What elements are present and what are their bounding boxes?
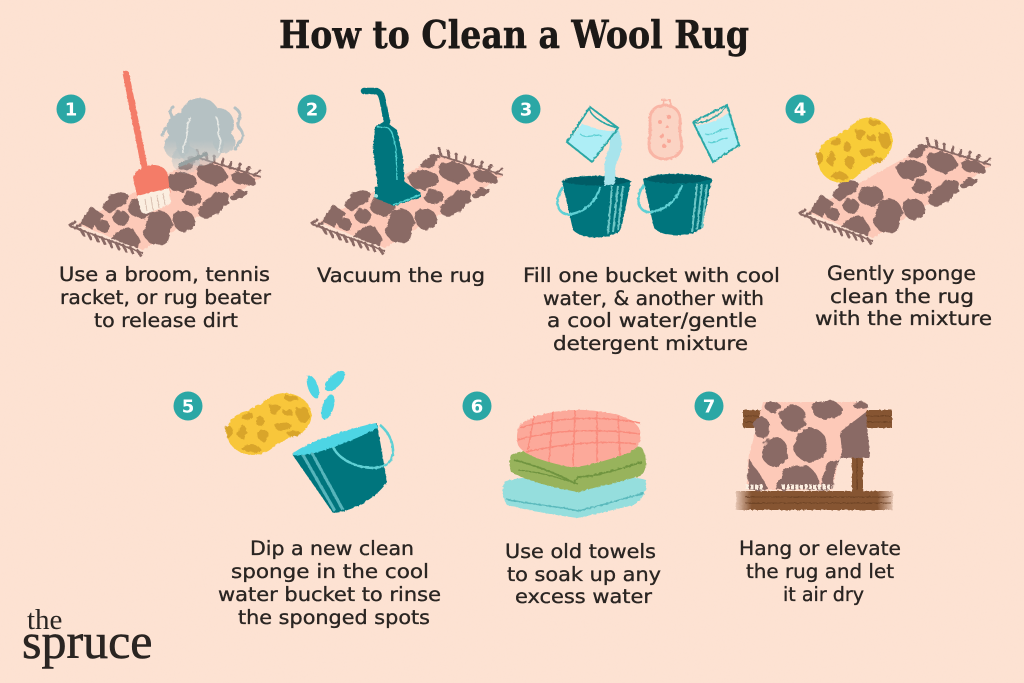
text: step 5: the sponged spots — [238, 606, 430, 629]
text: step 4: with the mixture — [815, 307, 992, 330]
icon: vacuum — [364, 91, 421, 206]
logo: the spruce: the — [27, 604, 62, 636]
logo: the spruce: spruce — [22, 613, 152, 669]
text: step 6 — [505, 540, 661, 608]
number badge 5 — [174, 392, 202, 420]
number badge 3: 3 — [520, 100, 532, 120]
icon: rug — [312, 148, 503, 254]
title: How to Clean a Wool Rug — [279, 12, 749, 57]
number badge 3 — [512, 94, 540, 124]
number badge 6 — [462, 392, 492, 420]
number badge 2 — [298, 94, 326, 124]
icon: tilted bucket — [292, 423, 393, 513]
text: step 3: a cool water/gentle — [547, 309, 757, 332]
icon: full glass — [693, 105, 739, 162]
panel: step 4 — [786, 94, 992, 330]
number badge 7 — [694, 392, 724, 420]
icon: rug and dust — [70, 98, 261, 256]
icon: left bucket — [557, 176, 631, 238]
text: step 1 — [59, 263, 272, 332]
text: step 4: Gently sponge — [827, 262, 976, 285]
icon: sponge — [818, 117, 892, 183]
text: step 2: Vacuum the rug — [317, 264, 485, 287]
number badge 5: 5 — [182, 396, 194, 418]
icon: water droplets — [304, 368, 348, 421]
text: step 1: racket, or rug beater — [60, 286, 272, 309]
number badge 6: 6 — [471, 396, 483, 418]
text: step 7: it air dry — [783, 583, 864, 606]
text: step 7 — [739, 537, 901, 606]
number badge 1 — [56, 94, 86, 124]
text: step 5: water bucket to rinse — [218, 583, 441, 606]
panel: step 1 — [56, 74, 272, 332]
icon: stacked towels — [503, 410, 646, 518]
icon: pouring glass — [567, 107, 622, 186]
text: step 7: Hang or elevate — [739, 537, 901, 560]
text: step 3 — [523, 264, 780, 355]
number badge 4 — [786, 94, 814, 124]
icon: rug — [800, 138, 991, 244]
text: step 1: Use a broom, tennis — [59, 263, 270, 286]
text: step 4 — [815, 262, 992, 330]
text: step 6: excess water — [515, 585, 653, 608]
text: step 4: clean the rug — [830, 285, 974, 308]
icon: right bucket — [638, 174, 712, 236]
text: step 3: Fill one bucket with cool — [523, 264, 780, 287]
panel: step 2 — [298, 91, 503, 287]
number badge 1: 1 — [65, 100, 77, 120]
text: step 7: the rug and let — [746, 560, 894, 583]
panel: step 6 — [462, 392, 661, 608]
text: step 6: to soak up any — [507, 563, 661, 586]
text: step 6: Use old towels — [505, 540, 656, 563]
text: step 5 — [218, 537, 441, 629]
text: step 5: Dip a new clean — [250, 537, 414, 560]
number badge 2: 2 — [306, 100, 318, 120]
icon: broom — [126, 74, 171, 214]
text: step 1: to release dirt — [94, 309, 238, 332]
text: step 3: detergent mixture — [553, 332, 748, 355]
number badge 4: 4 — [794, 100, 806, 120]
icon: drying rack and rug — [736, 401, 893, 510]
icon: detergent bottle — [649, 100, 682, 159]
icon: sponge — [227, 392, 311, 456]
text: step 5: sponge in the cool — [231, 560, 429, 583]
number badge 7: 7 — [703, 396, 715, 418]
panel: step 3 — [512, 94, 780, 355]
text: step 3: water, & another with — [543, 287, 764, 310]
panel: step 7 — [694, 392, 901, 606]
panel: step 5 — [174, 368, 441, 629]
